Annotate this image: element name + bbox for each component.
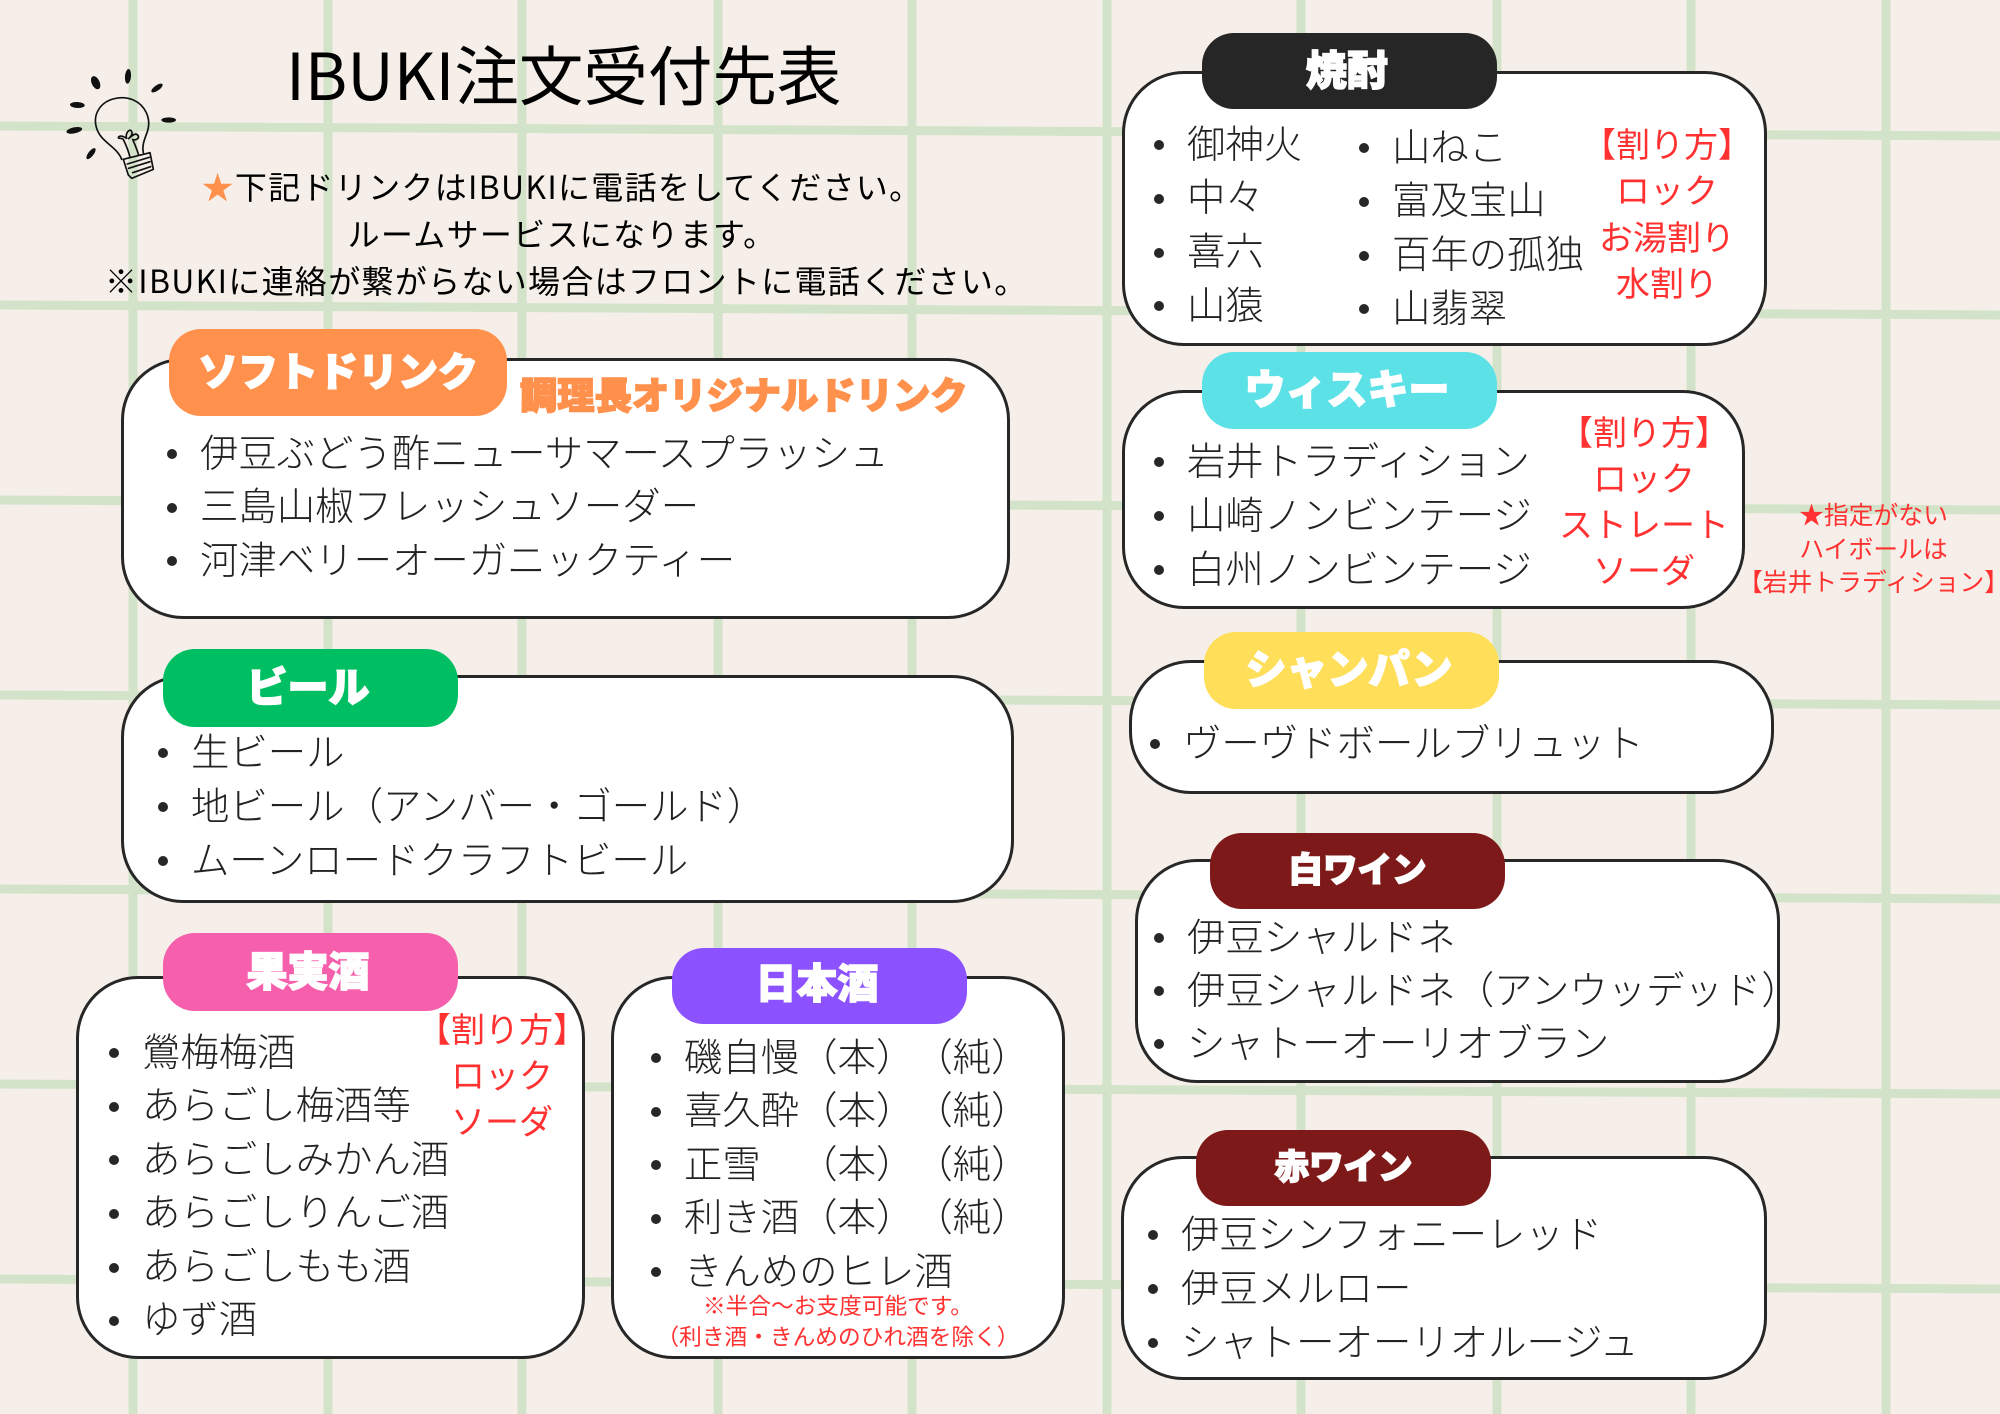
list: shochu column 1: 山猿 bbox=[1187, 275, 1264, 331]
panel: sake bbox=[611, 948, 1065, 1359]
list: red wine: 伊豆メルロー bbox=[1181, 1258, 1411, 1314]
callout: how to drink: ロック bbox=[1616, 164, 1718, 213]
list: white wine: 伊豆シャルドネ bbox=[1187, 906, 1456, 962]
callout: sake note bbox=[656, 1288, 1020, 1352]
list: shochu column 1: 中々 bbox=[1187, 167, 1264, 223]
callout: how to drink: 【割り方】 bbox=[417, 1003, 587, 1052]
callout: how to drink: ロック bbox=[1593, 452, 1695, 501]
list: soft drinks: 伊豆ぶどう酢ニューサマースプラッシュ bbox=[200, 422, 888, 478]
text block: ordering instructions: ルームサービスになります。 bbox=[348, 210, 776, 256]
heading: whisky: ウィスキー bbox=[1244, 356, 1450, 416]
callout: how to drink: ソーダ bbox=[1593, 544, 1695, 593]
list: beer: 生ビール bbox=[191, 722, 345, 778]
list: sake bbox=[651, 1026, 1030, 1296]
heading: fruit liquor bbox=[163, 933, 458, 1011]
list: sake: 利き酒（本）（純） bbox=[684, 1187, 1030, 1243]
heading: shochu: 焼酎 bbox=[1306, 36, 1388, 96]
list: sake: 喜久酔（本）（純） bbox=[684, 1080, 1030, 1136]
heading: red wine: 赤ワイン bbox=[1274, 1139, 1412, 1189]
panel: shochu bbox=[1122, 33, 1767, 346]
heading: sake bbox=[672, 948, 967, 1024]
list: shochu column 2: 富及宝山 bbox=[1392, 170, 1546, 226]
callout: how to drink: 【割り方】 bbox=[1582, 118, 1752, 167]
list: beer: ムーンロードクラフトビール bbox=[191, 830, 688, 886]
heading: champagne bbox=[1204, 632, 1499, 709]
heading: white wine bbox=[1210, 833, 1505, 909]
list: red wine bbox=[1148, 1204, 1638, 1368]
heading: shochu bbox=[1202, 33, 1497, 109]
list: shochu column 1: 喜六 bbox=[1187, 221, 1264, 277]
panel: red wine bbox=[1121, 1130, 1767, 1380]
list: shochu column 2: 山翡翠 bbox=[1392, 278, 1507, 334]
heading: red wine bbox=[1196, 1130, 1491, 1206]
panel: white wine bbox=[1135, 833, 1800, 1083]
heading: white wine: 白ワイン bbox=[1288, 842, 1426, 892]
list: red wine: シャトーオーリオルージュ bbox=[1181, 1312, 1638, 1368]
list: whisky: 岩井トラディション bbox=[1187, 430, 1530, 486]
panel: soft drinks bbox=[121, 329, 1010, 619]
callout: how to drink bbox=[1559, 406, 1729, 593]
list: shochu column 1: 御神火 bbox=[1187, 114, 1302, 170]
callout: how to drink: ロック bbox=[451, 1049, 553, 1098]
callout: sake note: （利き酒・きんめのひれ酒を除く） bbox=[656, 1319, 1020, 1352]
list: sake: 正雪 （本）（純） bbox=[684, 1134, 1030, 1190]
list: soft drinks: 三島山椒フレッシュソーダー bbox=[200, 476, 699, 532]
icon: light bulb bbox=[66, 69, 176, 180]
list: fruit liquor: 鶯梅梅酒 bbox=[142, 1022, 296, 1078]
heading: beer bbox=[163, 649, 458, 727]
heading: beer: ビール bbox=[246, 654, 370, 714]
title: IBUKI注文受付先表 bbox=[286, 25, 841, 119]
callout: how to drink: 水割り bbox=[1616, 257, 1718, 306]
callout: highball note: ハイボールは bbox=[1799, 530, 1948, 566]
list: sake: きんめのヒレ酒 bbox=[684, 1240, 953, 1296]
list: shochu column 2: 百年の孤独 bbox=[1392, 224, 1584, 280]
panel: beer bbox=[121, 649, 1014, 903]
list: soft drinks: 河津ベリーオーガニックティー bbox=[200, 530, 735, 586]
list: soft drinks bbox=[167, 422, 888, 586]
callout: how to drink: 【割り方】 bbox=[1559, 406, 1729, 455]
callout: highball note bbox=[1738, 496, 2000, 599]
callout: how to drink: お湯割り bbox=[1599, 211, 1735, 260]
text block: ordering instructions: ※IBUKIに連絡が繋がらない場合はフロントに電話ください。 bbox=[105, 257, 1028, 303]
list: beer bbox=[158, 722, 765, 886]
list: whisky: 白州ノンビンテージ bbox=[1187, 538, 1532, 594]
list: shochu column 2 bbox=[1359, 116, 1584, 334]
list: fruit liquor: あらごし梅酒等 bbox=[142, 1075, 411, 1131]
list: fruit liquor bbox=[109, 1022, 449, 1345]
callout: how to drink: ストレート bbox=[1559, 498, 1729, 547]
list: whisky bbox=[1154, 430, 1532, 594]
list: sake: 磯自慢（本）（純） bbox=[684, 1026, 1030, 1082]
heading: whisky bbox=[1202, 352, 1497, 429]
list: fruit liquor: あらごしもも酒 bbox=[142, 1236, 411, 1292]
list: shochu column 1 bbox=[1154, 114, 1302, 331]
callout: highball note: ★指定がない bbox=[1799, 496, 1948, 532]
list: white wine bbox=[1154, 906, 1800, 1068]
panel: fruit liquor bbox=[76, 933, 587, 1359]
list: whisky: 山崎ノンビンテージ bbox=[1187, 484, 1532, 540]
list: shochu column 2: 山ねこ bbox=[1392, 116, 1507, 172]
list: fruit liquor: あらごしりんご酒 bbox=[142, 1182, 449, 1238]
list: fruit liquor: ゆず酒 bbox=[142, 1289, 257, 1345]
text block: ordering instructions bbox=[105, 163, 1028, 303]
callout: sake note: ※半合～お支度可能です。 bbox=[703, 1288, 973, 1321]
callout: how to drink: ソーダ bbox=[451, 1095, 553, 1144]
list: white wine: シャトーオーリオブラン bbox=[1187, 1012, 1609, 1068]
heading: soft drinks bbox=[169, 329, 507, 416]
heading: champagne: シャンパン bbox=[1245, 636, 1453, 696]
list: beer: 地ビール（アンバー・ゴールド） bbox=[191, 776, 765, 832]
list: red wine: 伊豆シンフォニーレッド bbox=[1181, 1204, 1602, 1260]
list: champagne: ヴーヴドボールブリュット bbox=[1183, 713, 1644, 769]
panel: champagne bbox=[1129, 632, 1774, 794]
panel: whisky bbox=[1122, 352, 1745, 609]
callout: how to drink bbox=[417, 1003, 587, 1144]
heading: fruit liquor: 果実酒 bbox=[246, 938, 370, 998]
list: fruit liquor: あらごしみかん酒 bbox=[142, 1129, 449, 1185]
list: white wine: 伊豆シャルドネ（アンウッデッド） bbox=[1187, 960, 1800, 1016]
text block: ordering instructions: ★下記ドリンクはIBUKIに電話をしてください。 bbox=[202, 163, 922, 209]
callout: how to drink bbox=[1582, 118, 1752, 306]
heading: sake: 日本酒 bbox=[756, 950, 878, 1010]
heading: chef's original drinks: 調理長オリジナルドリンク bbox=[520, 366, 968, 420]
heading: soft drinks: ソフトドリンク bbox=[198, 340, 478, 398]
